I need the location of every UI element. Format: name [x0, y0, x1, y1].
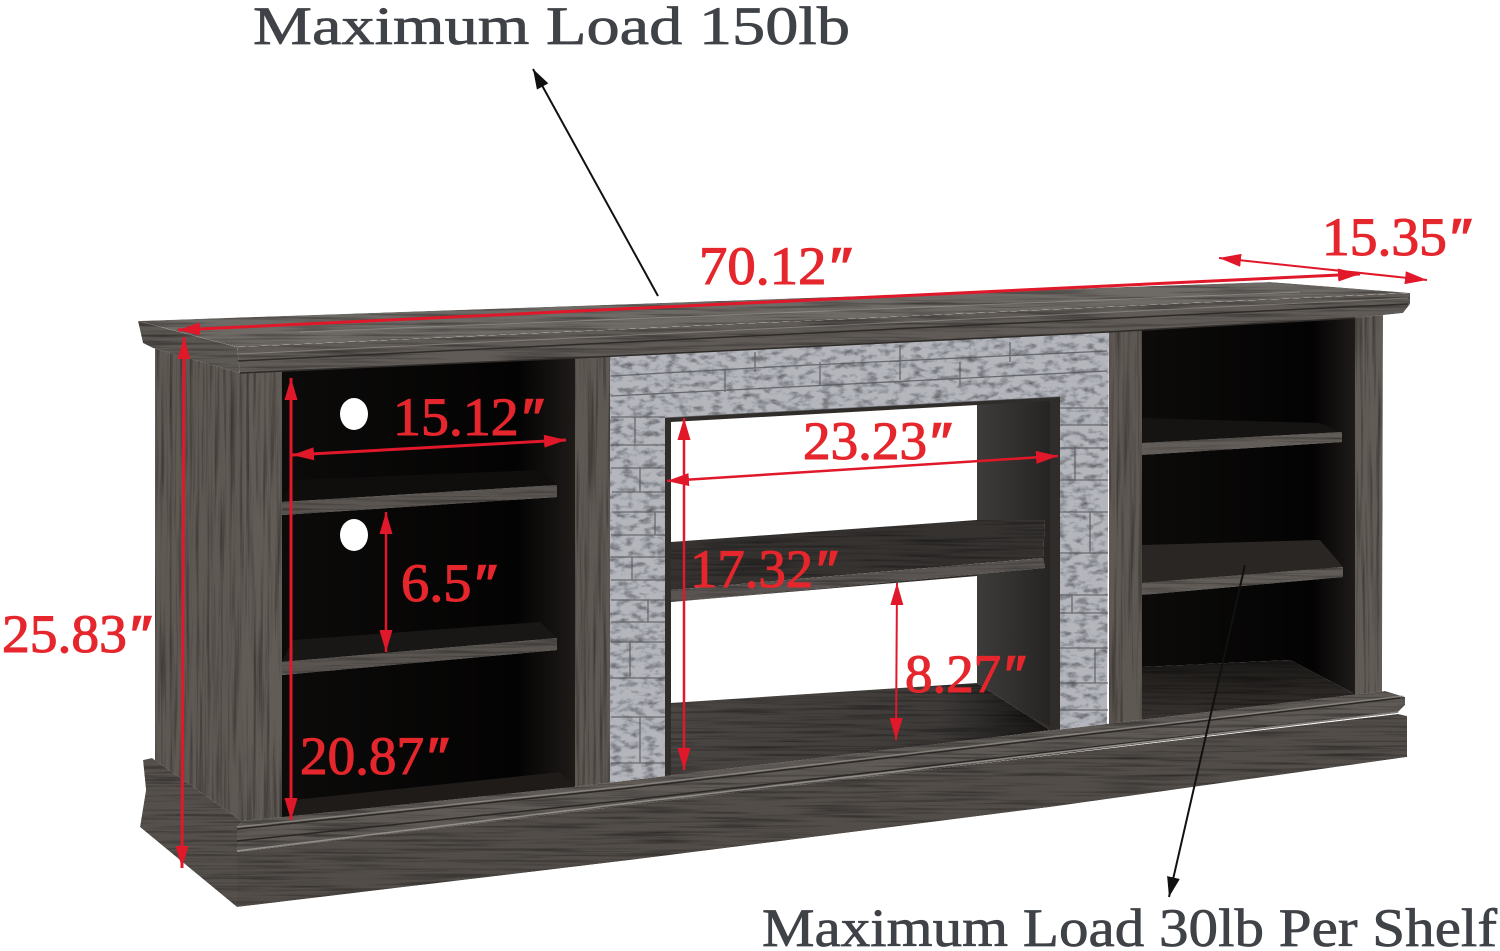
left shelf lower [282, 638, 557, 675]
left side panel [155, 346, 243, 825]
label: 8.27: 8.27″ [905, 644, 1025, 704]
base front plinth [237, 714, 1407, 907]
label: 15.35: 15.35″ [1322, 207, 1471, 267]
label: 70.12: 70.12″ [699, 236, 851, 296]
fireplace shelf [671, 520, 1045, 602]
dimension: 25.83 height arrow [182, 337, 184, 868]
right shelf upper [1142, 432, 1342, 455]
arrow: 150lb leader [533, 69, 658, 296]
left front stile [242, 370, 282, 825]
right stile [1355, 314, 1383, 705]
left shelf upper [282, 485, 557, 515]
label: 23.23: 23.23″ [803, 411, 951, 471]
label: 20.87: 20.87″ [300, 726, 448, 786]
right shelf lower [1142, 567, 1343, 595]
tv stand furniture [138, 282, 1410, 907]
dimension: 15.12 arrow [292, 440, 566, 455]
fireplace floor [671, 683, 1050, 782]
dimension: 17.32 arrow [683, 418, 685, 770]
dimension: 70.12 width arrow [178, 274, 1360, 330]
dimension: 20.87 arrow [290, 378, 292, 820]
right compartment [1142, 316, 1355, 730]
label: 15.12: 15.12″ [393, 387, 543, 447]
label: 25.83: 25.83″ [2, 604, 151, 664]
right compartment floor [1142, 660, 1353, 730]
dimension: 6.5 arrow [385, 512, 387, 652]
dimension: 8.27 arrow [896, 583, 897, 740]
label: 17.32: 17.32″ [690, 539, 837, 599]
cable hole upper [340, 398, 368, 430]
dimension: 15.35 depth arrow [1219, 258, 1427, 280]
left compartment [282, 357, 576, 822]
top front molding [237, 293, 1410, 373]
cable hole lower [340, 519, 368, 551]
dimension: 23.23 arrow [667, 456, 1058, 481]
label: 6.5: 6.5″ [401, 553, 496, 613]
top side molding [138, 321, 240, 373]
base side [140, 758, 243, 907]
center right pillar [1109, 327, 1142, 735]
fireplace opening [665, 397, 1060, 784]
center left pillar [575, 353, 611, 790]
arrow: 30lb leader [1169, 565, 1245, 897]
base top molding [237, 691, 1405, 854]
stone surround [610, 328, 1109, 786]
top surface [138, 282, 1410, 347]
